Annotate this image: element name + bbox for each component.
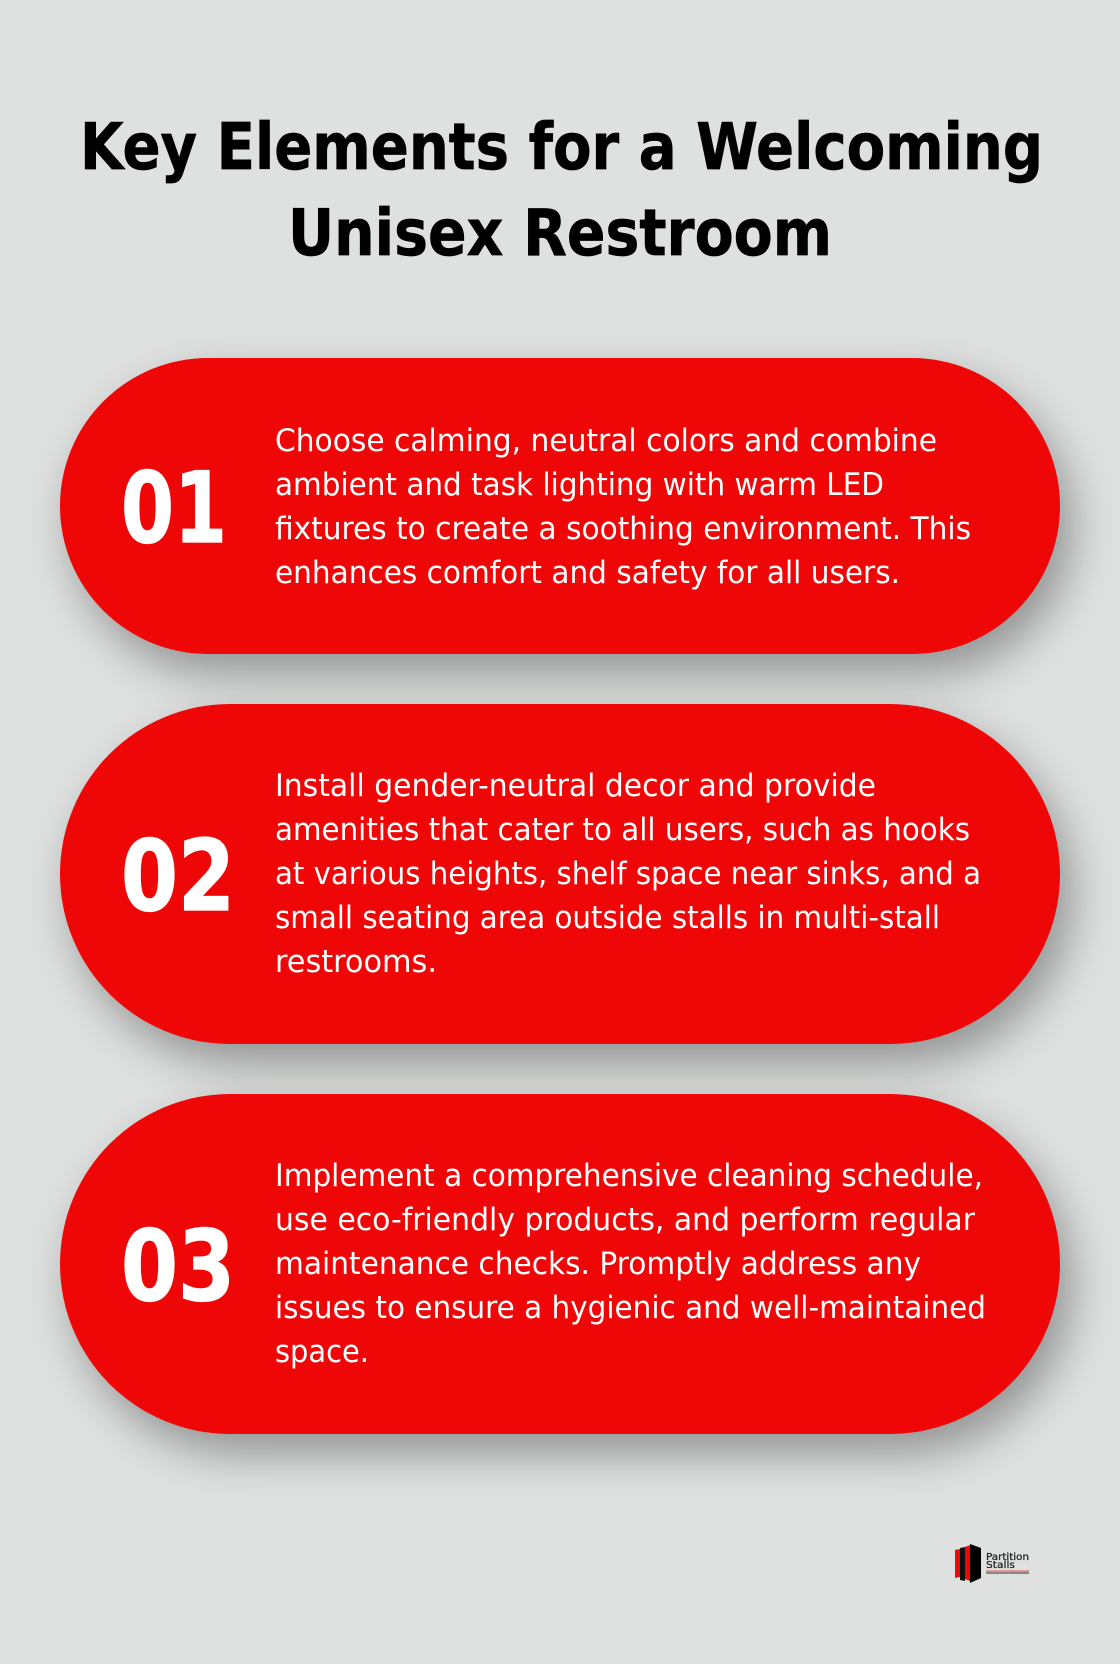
- logo: Partition Stalls: [955, 1544, 1029, 1583]
- body text 02: amenities that cater to all users, such as hooks: [275, 812, 970, 848]
- logo wordmark: Stalls: [986, 1560, 1015, 1571]
- body text 03: maintenance checks. Promptly address any: [275, 1246, 921, 1282]
- body text 01: ambient and task lighting with warm LED: [275, 467, 884, 503]
- number 03: 03: [121, 1210, 235, 1324]
- panel: step 01: [60, 358, 1060, 654]
- pill background 02: [60, 704, 1060, 1044]
- body text 03: Implement a comprehensive cleaning schedule,: [275, 1158, 983, 1194]
- body text 01: [275, 423, 971, 591]
- number 01: 01: [121, 452, 227, 566]
- body text 01: enhances comfort and safety for all users.: [275, 555, 900, 591]
- body text 01: fixtures to create a soothing environment. This: [275, 511, 971, 547]
- body text 03: [275, 1158, 986, 1370]
- icon: partition panels: [955, 1544, 981, 1583]
- body text 02: Install gender-neutral decor and provide: [275, 768, 876, 804]
- body text 03: issues to ensure a hygienic and well-maintained: [275, 1290, 986, 1326]
- title: [80, 111, 1043, 271]
- pill background 01: [60, 358, 1060, 654]
- body text 03: use eco-friendly products, and perform regular: [275, 1202, 975, 1238]
- body text 02: at various heights, shelf space near sinks, and a: [275, 856, 981, 892]
- body text 03: space.: [275, 1334, 369, 1370]
- number 02: 02: [121, 820, 235, 934]
- body text 02: [275, 768, 981, 980]
- panel: step 02: [60, 704, 1060, 1044]
- body text 02: small seating area outside stalls in multi-stall: [275, 900, 940, 936]
- logo wordmark: [986, 1552, 1029, 1574]
- panel: step 03: [60, 1094, 1060, 1434]
- body text 02: restrooms.: [275, 944, 437, 980]
- pill background 03: [60, 1094, 1060, 1434]
- logo wordmark: Partition: [986, 1552, 1029, 1563]
- title: Unisex Restroom: [288, 197, 832, 271]
- body text 01: Choose calming, neutral colors and combine: [275, 423, 937, 459]
